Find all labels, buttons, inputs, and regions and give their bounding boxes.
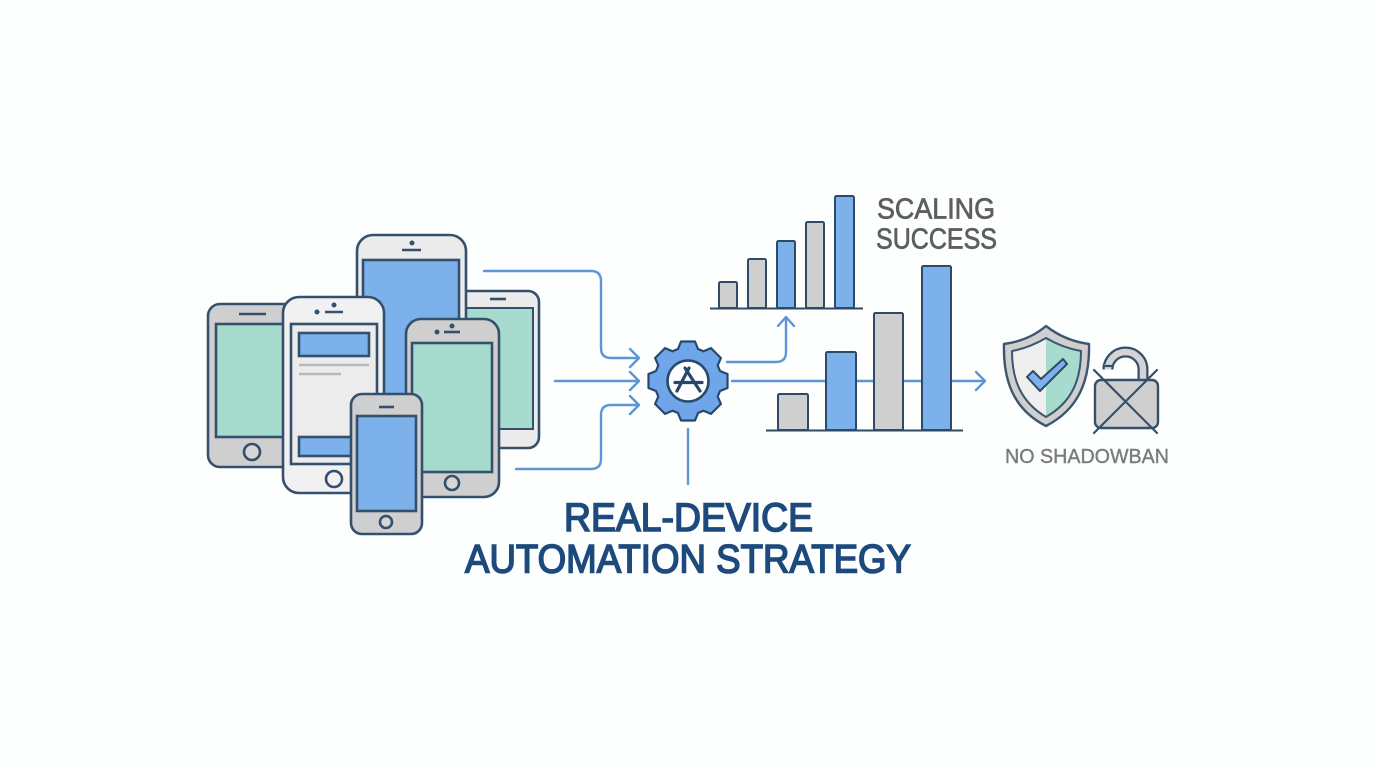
icon: open lock crossed out: [1094, 352, 1158, 433]
heading: scaling success: SUCCESS: [876, 224, 997, 256]
phone: right back: [440, 291, 539, 448]
label: no shadowban: NO SHADOWBAN: [1005, 446, 1169, 468]
icon: shield with check: [1004, 326, 1089, 426]
app banner: [299, 333, 369, 356]
title: AUTOMATION STRATEGY: [465, 538, 911, 582]
bar chart: large: [766, 266, 963, 430]
connector arrows out of gear: [688, 317, 985, 484]
title: REAL-DEVICE: [564, 496, 813, 540]
phone cluster: [208, 235, 539, 534]
text placeholder lines: [299, 365, 369, 374]
phone: right front: [406, 319, 499, 497]
bar chart: small: [710, 196, 863, 308]
phone: left: [208, 304, 300, 467]
phone: small front: [351, 394, 422, 534]
phone: top back: [357, 235, 466, 435]
phone: white app mockup: [283, 297, 384, 493]
title: [465, 496, 911, 582]
connector arrows into gear: [484, 271, 639, 469]
heading: scaling success: [876, 194, 997, 256]
app button: [299, 437, 369, 456]
heading: scaling success: SCALING: [877, 194, 995, 226]
icon: gear with app symbol: [648, 342, 728, 420]
